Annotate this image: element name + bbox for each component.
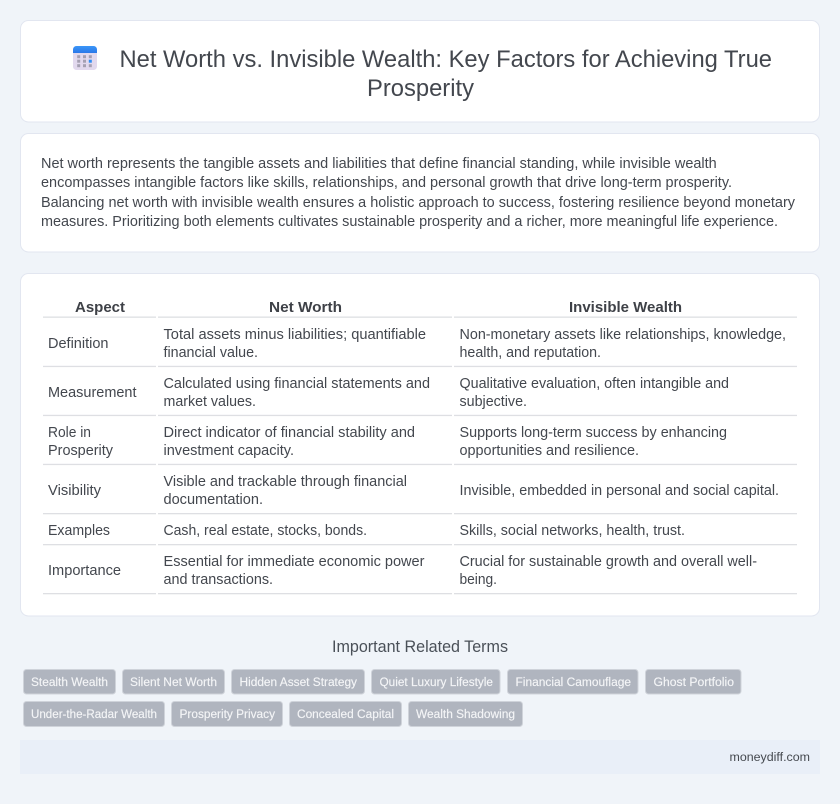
row: measurement: Qualitative evaluation, often intangible and bbox=[460, 376, 729, 392]
row: role in prosperity bbox=[48, 425, 727, 459]
description text block: encompasses intangible factors like skills, relationships, and personal growth that drive long-term prosperity. bbox=[41, 175, 732, 191]
table header row: Invisible Wealth bbox=[569, 299, 682, 316]
footer source text: moneydiff.com bbox=[730, 750, 810, 764]
tag: Prosperity Privacy: Prosperity Privacy bbox=[180, 707, 276, 721]
tag: Quiet Luxury Lifestyle: Quiet Luxury Lifestyle bbox=[380, 675, 493, 689]
row: definition bbox=[48, 327, 786, 361]
row: role in prosperity: Prosperity bbox=[48, 443, 114, 459]
row: visibility: Visibility bbox=[48, 483, 102, 499]
row: visibility bbox=[48, 474, 779, 508]
tag: Wealth Shadowing bbox=[408, 702, 522, 726]
tag: Silent Net Worth: Silent Net Worth bbox=[130, 675, 217, 689]
icon: calendar bbox=[73, 46, 97, 70]
row: definition: health, and reputation. bbox=[460, 345, 601, 361]
row: importance: being. bbox=[460, 572, 497, 588]
description text block: Balancing net worth with invisible wealth ensures a holistic approach to success, fostering resilience beyond monetary bbox=[41, 195, 796, 211]
row: importance bbox=[48, 554, 757, 588]
row: importance: Essential for immediate economic power bbox=[164, 554, 425, 570]
title: Prosperity bbox=[367, 75, 475, 102]
heading: important related terms: Important Related Terms bbox=[332, 638, 508, 656]
row: examples: Cash, real estate, stocks, bonds. bbox=[164, 523, 367, 539]
panel: comparison table bbox=[20, 274, 820, 616]
tag: Stealth Wealth bbox=[24, 670, 116, 694]
tag: Concealed Capital: Concealed Capital bbox=[297, 707, 394, 721]
tag: Stealth Wealth: Stealth Wealth bbox=[31, 675, 108, 689]
row: measurement: Calculated using financial statements and bbox=[164, 376, 430, 392]
row: importance: Importance bbox=[48, 563, 121, 579]
row: definition: Total assets minus liabilities; quantifiable bbox=[164, 327, 426, 343]
row: definition: Definition bbox=[48, 336, 108, 352]
title: Net Worth vs. Invisible Wealth: Key Factors for Achieving True bbox=[120, 46, 772, 73]
description text block: measures. Prioritizing both elements cultivates sustainable prosperity and a richer, more meaningful life experience. bbox=[41, 214, 778, 230]
row: examples: Skills, social networks, health, trust. bbox=[460, 523, 685, 539]
row: measurement bbox=[48, 376, 729, 410]
tag: Silent Net Worth bbox=[122, 670, 224, 694]
row: role in prosperity: opportunities and resilience. bbox=[460, 443, 639, 459]
tag: Financial Camouflage: Financial Camouflage bbox=[516, 675, 631, 689]
title bbox=[120, 46, 772, 102]
table header row: Aspect bbox=[75, 299, 125, 316]
row: role in prosperity: Direct indicator of financial stability and bbox=[164, 425, 415, 441]
panel: description bbox=[20, 134, 820, 252]
row: examples bbox=[48, 523, 685, 539]
tag: Quiet Luxury Lifestyle bbox=[372, 670, 500, 694]
row: visibility: Visible and trackable through financial bbox=[164, 474, 407, 490]
row: role in prosperity: Supports long-term success by enhancing bbox=[460, 425, 727, 441]
row: importance: Crucial for sustainable growth and overall well- bbox=[460, 554, 757, 570]
row: role in prosperity: investment capacity. bbox=[164, 443, 294, 459]
table header row bbox=[75, 299, 682, 316]
description text block: Net worth represents the tangible assets and liabilities that define financial standing, while invisible wealth bbox=[41, 156, 717, 172]
row: measurement: subjective. bbox=[460, 394, 527, 410]
tag: Prosperity Privacy bbox=[172, 702, 282, 726]
row: visibility: documentation. bbox=[164, 492, 263, 508]
row: importance: and transactions. bbox=[164, 572, 273, 588]
tag: Under-the-Radar Wealth: Under-the-Radar Wealth bbox=[31, 707, 157, 721]
row: measurement: market values. bbox=[164, 394, 256, 410]
tag: Hidden Asset Strategy: Hidden Asset Strategy bbox=[240, 675, 358, 689]
tag: Concealed Capital bbox=[290, 702, 402, 726]
related term tags bbox=[24, 670, 741, 726]
tag: Wealth Shadowing: Wealth Shadowing bbox=[416, 707, 515, 721]
tag: Ghost Portfolio: Ghost Portfolio bbox=[654, 675, 734, 689]
row: visibility: Invisible, embedded in personal and social capital. bbox=[460, 483, 779, 499]
row: role in prosperity: Role in bbox=[48, 425, 91, 441]
tag: Ghost Portfolio bbox=[646, 670, 741, 694]
table header row: Net Worth bbox=[269, 299, 342, 316]
tag: Financial Camouflage bbox=[508, 670, 638, 694]
row: examples: Examples bbox=[48, 523, 110, 539]
description text block bbox=[41, 156, 796, 230]
footer bar bbox=[20, 740, 820, 774]
row: measurement: Measurement bbox=[48, 385, 136, 401]
tag: Under-the-Radar Wealth bbox=[24, 702, 164, 726]
row: definition: Non-monetary assets like relationships, knowledge, bbox=[460, 327, 786, 343]
row: definition: financial value. bbox=[164, 345, 258, 361]
tag: Hidden Asset Strategy bbox=[232, 670, 364, 694]
header panel bbox=[20, 20, 820, 122]
